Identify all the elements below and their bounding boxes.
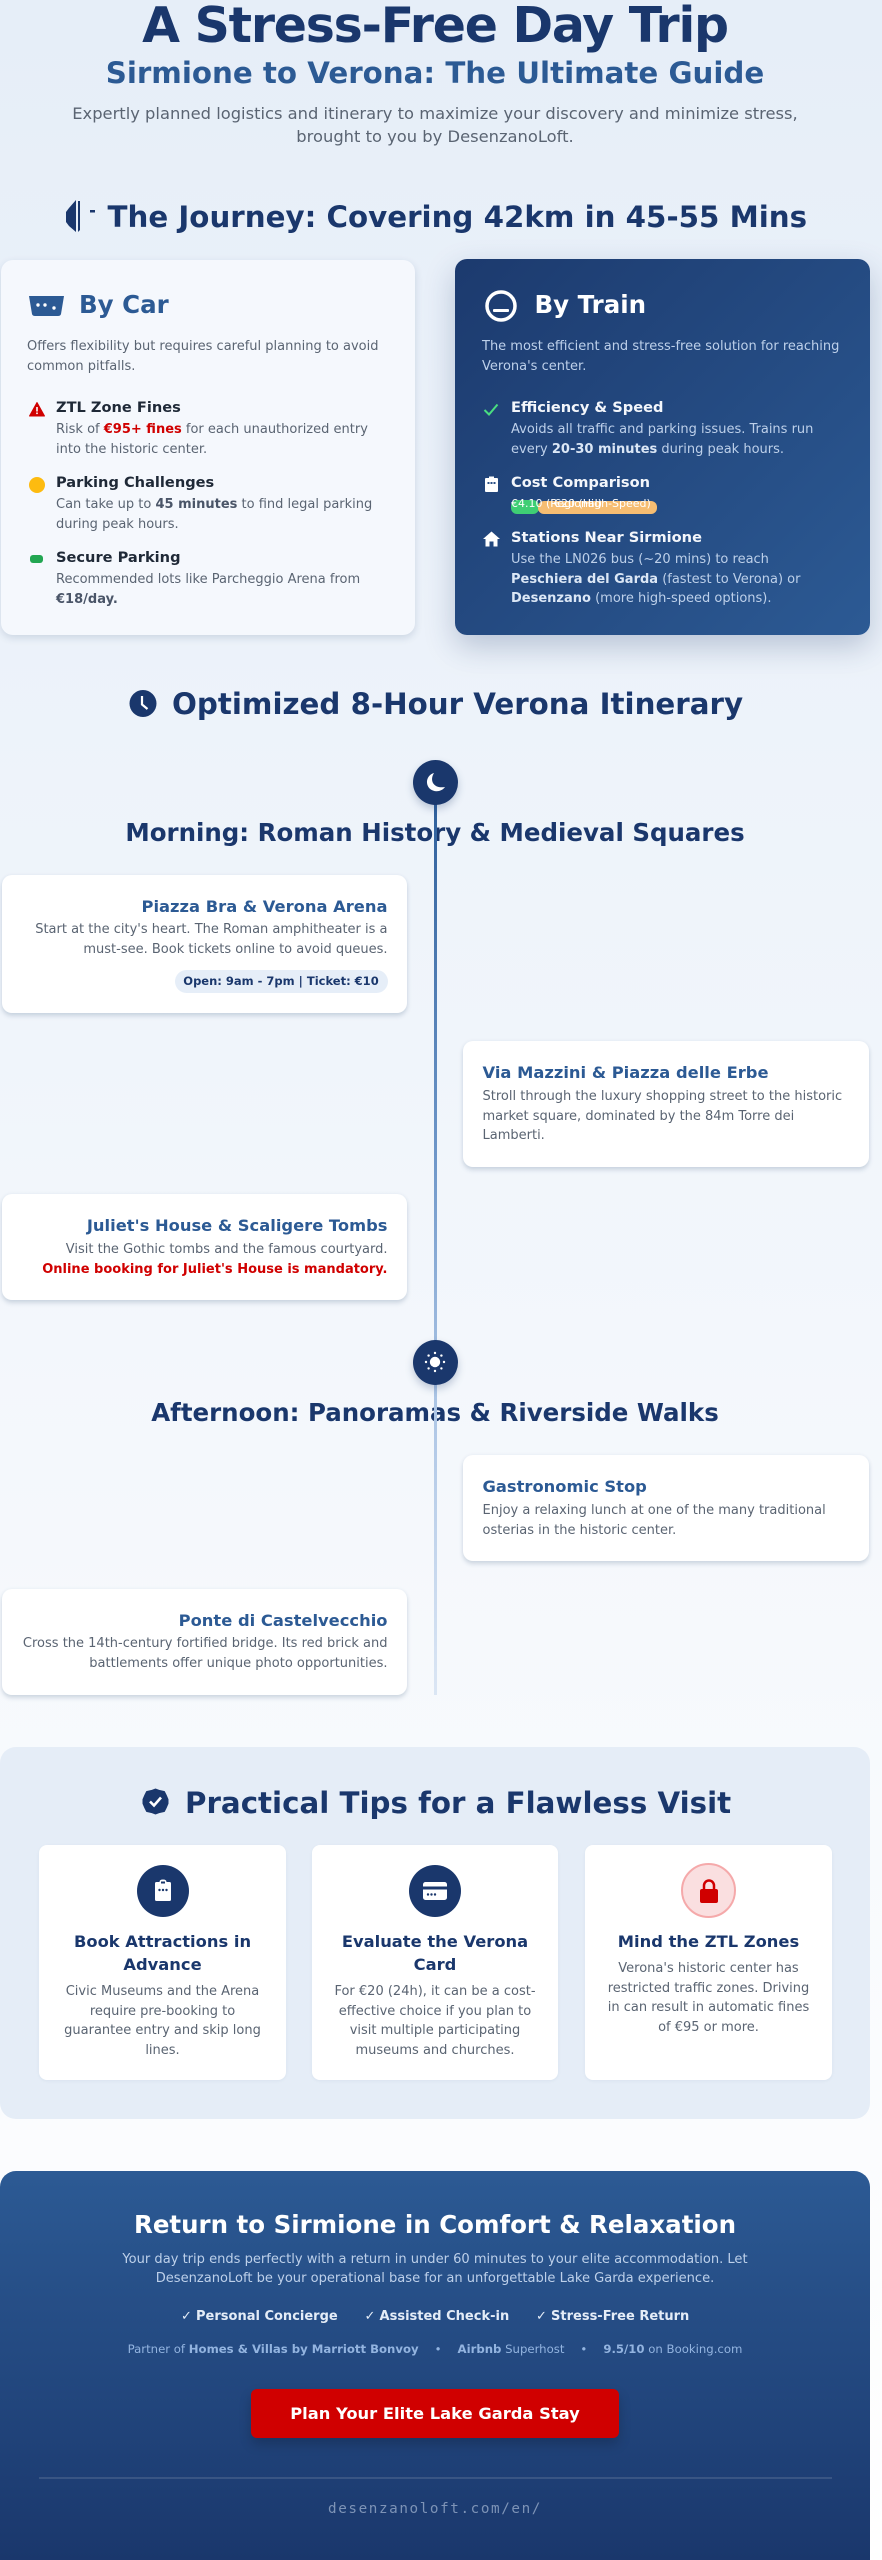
icon: card: [409, 1865, 461, 1917]
card: juliet's house: Visit the Gothic tombs and the famous courtyard.: [66, 1242, 388, 1257]
tip: verona card: Evaluate the Verona: [342, 1932, 528, 1951]
train intro: [482, 339, 839, 374]
card: piazza bra: [2, 875, 407, 1013]
panel: practical tips: [0, 1747, 870, 2119]
bar: regional: [511, 500, 539, 514]
train intro: The most efficient and stress-free solution for reaching: [482, 339, 839, 354]
icon: check: [484, 404, 498, 416]
pill: opening hours: Open: 9am - 7pm | Ticket: €10: [183, 974, 379, 988]
card: ponte di castelvecchio: [2, 1589, 407, 1695]
tip: ztl zones: restricted traffic zones. Driving: [608, 1980, 809, 1996]
icon: clock: [130, 690, 156, 717]
item: cost comparison: [485, 474, 657, 514]
item: stations: [483, 529, 800, 606]
icon: ticket clipboard: [485, 476, 498, 492]
icon: house: [483, 532, 500, 546]
url: desenzanoloft.com/en/: [328, 2501, 542, 2517]
intro text: Expertly planned logistics and itinerary to maximize your discovery and minimize stress,: [72, 104, 798, 123]
icon: amber dot: [29, 477, 45, 493]
item: stations: Peschiera del Garda (fastest to Verona) or: [511, 572, 800, 586]
train intro: Verona's center.: [482, 358, 586, 374]
car heading: By Car: [79, 290, 169, 319]
card: via mazzini: Lamberti.: [482, 1128, 545, 1143]
heading text: The Journey: Covering 42km in 45-55 Mins: [108, 200, 807, 234]
card: piazza bra: Piazza Bra & Verona Arena: [141, 897, 388, 916]
timeline marker: morning: [412, 760, 458, 804]
benefits list: [181, 2309, 689, 2324]
tip: book attractions: guarantee entry and skip long: [64, 2023, 261, 2038]
tip: verona card: visit multiple participating: [350, 2023, 520, 2038]
icon: car: [29, 296, 64, 316]
divider is decorative: [39, 2477, 832, 2479]
item: secure parking: Secure Parking: [56, 549, 181, 566]
car intro: [27, 339, 378, 374]
heading text: Optimized 8-Hour Verona Itinerary: [172, 687, 743, 721]
item: parking challenges: Can take up to 45 minutes to find legal parking: [56, 497, 372, 512]
icon: road: [66, 200, 95, 232]
afternoon heading: Afternoon: Panoramas & Riverside Walks: [151, 1398, 719, 1427]
item: secure parking: €18/day.: [56, 592, 118, 606]
section heading: itinerary: [130, 687, 743, 721]
cta text: DesenzanoLoft be your operational base for an unforgettable Lake Garda experience.: [156, 2271, 714, 2286]
tip: book attractions: [39, 1845, 286, 2080]
item: efficiency: Efficiency & Speed: [511, 399, 663, 416]
tip: verona card: effective choice if you plan to: [339, 2004, 531, 2018]
cta text: [122, 2252, 748, 2286]
tip: book attractions: require pre-booking to: [90, 2004, 235, 2018]
item: parking challenges: during peak hours.: [56, 516, 179, 532]
benefits list: ✓ Assisted Check-in: [364, 2309, 509, 2324]
cta text: Your day trip ends perfectly with a return in under 60 minutes to your elite accommodation. Let: [122, 2252, 748, 2266]
card: via mazzini: Via Mazzini & Piazza delle Erbe: [482, 1063, 769, 1082]
card: ponte di castelvecchio: battlements offer unique photo opportunities.: [89, 1656, 388, 1670]
tip: book attractions: Book Attractions in: [74, 1932, 251, 1951]
car intro: common pitfalls.: [27, 358, 135, 374]
icon: sun: [424, 1352, 446, 1372]
card: piazza bra: must-see. Book tickets online to avoid queues.: [83, 942, 388, 956]
card: via mazzini: market square, dominated by the 84m Torre dei: [482, 1108, 794, 1124]
item: secure parking: Recommended lots like Parcheggio Arena from: [56, 572, 360, 587]
car intro: Offers flexibility but requires careful planning to avoid: [27, 339, 378, 354]
tip: book attractions: Advance: [123, 1955, 202, 1974]
intro text: brought to you by DesenzanoLoft.: [296, 127, 574, 146]
card: piazza bra: Start at the city's heart. The Roman amphitheater is a: [35, 922, 388, 937]
card: gastronomic stop: [463, 1455, 869, 1561]
icon: clipboard: [136, 1865, 188, 1917]
partner badges: Partner of Homes & Villas by Marriott Bonvoy • Airbnb Superhost • 9.5/10 on Booking.com: [128, 2342, 742, 2356]
tip: ztl zones: Mind the ZTL Zones: [618, 1932, 799, 1951]
item: efficiency: [484, 399, 813, 456]
card: ponte di castelvecchio: Ponte di Castelvecchio: [179, 1611, 388, 1630]
card: juliet's house: [2, 1194, 407, 1300]
cta heading: Return to Sirmione in Comfort & Relaxation: [134, 2210, 736, 2239]
card: gastronomic stop: Enjoy a relaxing lunch at one of the many traditional: [482, 1503, 826, 1518]
item: efficiency: Avoids all traffic and parking issues. Trains run: [511, 422, 813, 437]
icon: green pill: [30, 555, 43, 563]
item: stations: Use the LN026 bus (~20 mins) to reach: [511, 552, 769, 567]
timeline marker: afternoon: [412, 1340, 458, 1384]
label: high-speed: €20 (High-Speed): [554, 497, 651, 510]
item: stations: Stations Near Sirmione: [511, 529, 702, 546]
button: Plan Your Elite Lake Garda Stay: [290, 2404, 580, 2423]
tip: ztl zones: [585, 1845, 832, 2080]
item: parking challenges: Parking Challenges: [56, 474, 214, 491]
tip: verona card: museums and churches.: [355, 2042, 515, 2058]
item: ZTL fines: into the historic center.: [56, 442, 207, 456]
tip: verona card: For €20 (24h), it can be a cost-: [334, 1984, 536, 1999]
tip: ztl zones: of €95 or more.: [658, 2020, 759, 2034]
pill: opening hours: [174, 970, 388, 993]
icon: warning: [29, 402, 45, 416]
item: ZTL fines: ZTL Zone Fines: [56, 399, 181, 416]
card: ponte di castelvecchio: Cross the 14th-century fortified bridge. Its red brick and: [23, 1636, 388, 1651]
label: regional: €4.10 (Regional): [511, 497, 602, 510]
train heading: By Train: [534, 290, 646, 319]
icon: train: [485, 290, 517, 322]
tip: book attractions: Civic Museums and the Arena: [66, 1984, 259, 1999]
item: parking challenges: [29, 474, 372, 532]
tip: verona card: Card: [414, 1955, 456, 1974]
tip: verona card: [312, 1845, 558, 2080]
item: stations: Desenzano (more high-speed options).: [511, 591, 772, 606]
card: juliet's house: Online booking for Juliet's House is mandatory.: [42, 1262, 388, 1276]
panel: by car: [1, 260, 415, 635]
card: juliet's house: Juliet's House & Scaligere Tombs: [87, 1216, 388, 1235]
tip: book attractions: lines.: [145, 2042, 180, 2058]
intro text: [72, 104, 798, 146]
tips heading: Practical Tips for a Flawless Visit: [185, 1786, 731, 1820]
tip: ztl zones: Verona's historic center has: [618, 1961, 799, 1976]
timeline line: [434, 800, 436, 1695]
card: gastronomic stop: osterias in the historic center.: [482, 1522, 676, 1538]
item: ZTL fines: [29, 399, 368, 456]
subtitle: Sirmione to Verona: The Ultimate Guide: [106, 56, 764, 90]
benefits list: ✓ Stress-Free Return: [536, 2309, 689, 2324]
item: ZTL fines: Risk of €95+ fines for each unauthorized entry: [56, 422, 368, 437]
item: cost comparison: Cost Comparison: [511, 474, 650, 491]
item: efficiency: every 20-30 minutes during peak hours.: [511, 442, 784, 456]
morning heading: Morning: Roman History & Medieval Squares: [125, 818, 745, 847]
card: via mazzini: Stroll through the luxury shopping street to the historic: [482, 1089, 842, 1104]
section heading: the journey: [66, 200, 807, 234]
tip: ztl zones: in can result in automatic fines: [608, 2000, 809, 2015]
panel: by train: [455, 259, 870, 635]
icon: lock: [681, 1863, 736, 1918]
card: gastronomic stop: Gastronomic Stop: [482, 1477, 647, 1496]
icon: badge check: [142, 1788, 168, 1814]
item: secure parking: [30, 549, 360, 606]
card: via mazzini: [463, 1041, 869, 1167]
icon: moon: [426, 773, 445, 792]
bar: high-speed: [538, 501, 657, 514]
benefits list: ✓ Personal Concierge: [181, 2309, 338, 2324]
button: [251, 2389, 619, 2438]
panel: call to action: [0, 2171, 870, 2560]
